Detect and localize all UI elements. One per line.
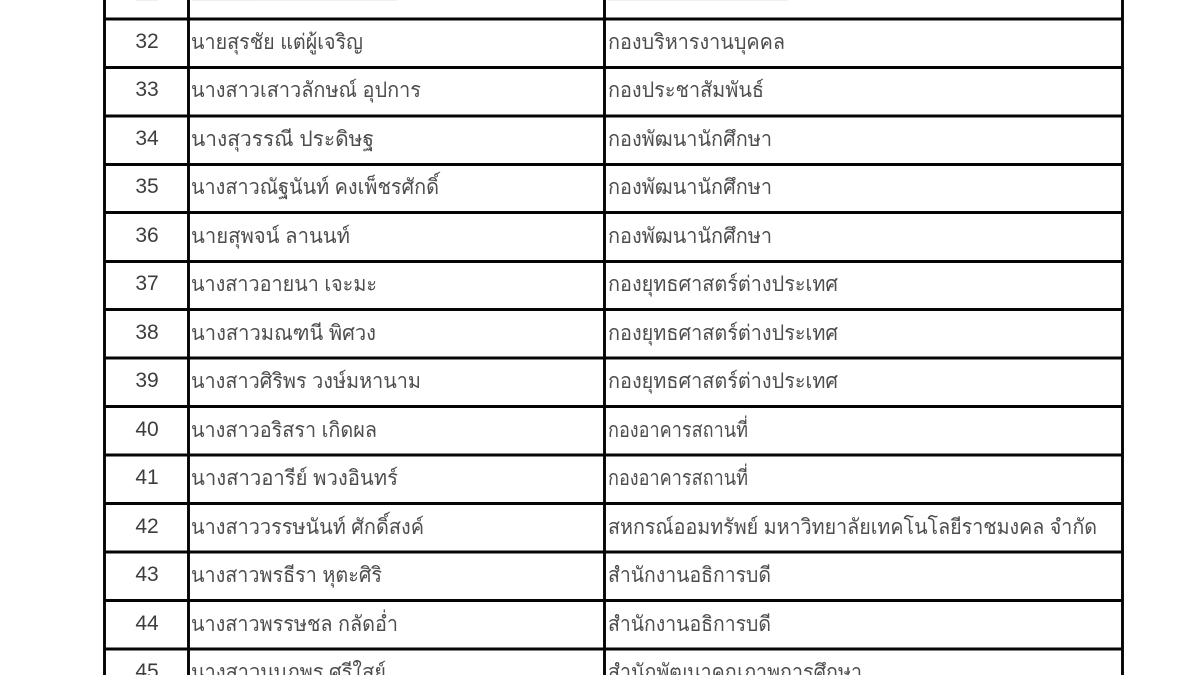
row 35 <box>135 171 772 199</box>
row 39: นางสาวศิริพร วงษ์มหานาม <box>191 369 421 393</box>
row 42: 42 <box>135 515 159 538</box>
row 37: 37 <box>135 272 159 295</box>
row 36: นายสุพจน์ ลานนท์ <box>191 224 350 249</box>
row 40: นางสาวอริสรา เกิดผล <box>191 419 377 442</box>
row 41: 41 <box>135 466 159 489</box>
row 34: 34 <box>135 127 159 150</box>
row 38: 38 <box>135 321 159 344</box>
row 35: นางสาวณัฐนันท์ คงเพ็ชรศักดิ์ <box>191 171 441 199</box>
row 34 <box>135 127 772 152</box>
row 41: กองอาคารสถานที่ <box>608 463 748 490</box>
row 39: 39 <box>135 369 159 392</box>
row 32: 32 <box>135 30 159 53</box>
row 38 <box>135 321 839 346</box>
row 35: กองพัฒนานักศึกษา <box>608 176 772 199</box>
row 33: นางสาวเสาวลักษณ์ อุปการ <box>191 78 421 103</box>
row 38: นางสาวมณฑนี พิศวง <box>191 322 376 345</box>
row 43: สำนักงานอธิการบดี <box>608 564 771 587</box>
row 33 <box>135 78 764 103</box>
row 42: นางสาววรรษนันท์ ศักดิ์สงค์ <box>191 511 424 539</box>
row 39: กองยุทธศาสตร์ต่างประเทศ <box>608 369 839 394</box>
row 36: กองพัฒนานักศึกษา <box>608 225 772 248</box>
row 43 <box>135 563 771 588</box>
row 40: 40 <box>135 418 159 441</box>
row 36: 36 <box>135 224 159 247</box>
row 42 <box>135 511 1097 539</box>
row 41: นางสาวอารีย์ พวงอินทร์ <box>191 466 398 490</box>
row 37: นางสาวอายนา เจะมะ <box>191 273 377 296</box>
row 42: สหกรณ์ออมทรัพย์ มหาวิทยาลัยเทคโนโลยีราชมงคล จำกัด <box>608 515 1097 539</box>
row 40 <box>135 415 748 442</box>
row 37 <box>135 272 839 297</box>
row 32: กองบริหารงานบุคคล <box>608 31 785 55</box>
row 44: สำนักงานอธิการบดี <box>608 613 771 636</box>
row 34: นางสุวรรณี ประดิษฐ <box>191 128 374 152</box>
row 45 <box>135 660 862 675</box>
row 36 <box>135 224 772 249</box>
row 35: 35 <box>135 175 159 198</box>
row 33: กองประชาสัมพันธ์ <box>608 78 764 102</box>
row 38: กองยุทธศาสตร์ต่างประเทศ <box>608 321 839 346</box>
row 43: 43 <box>135 563 159 586</box>
row 39 <box>135 369 839 394</box>
row 33: 33 <box>135 78 159 101</box>
row 40: กองอาคารสถานที่ <box>608 415 748 442</box>
row 32 <box>135 30 785 55</box>
row 41 <box>135 463 748 490</box>
row 32: นายสุรชัย แต่ผู้เจริญ <box>191 31 363 55</box>
row 44: นางสาวพรรษชล กลัดอ่ำ <box>191 609 398 636</box>
row 34: กองพัฒนานักศึกษา <box>608 128 772 151</box>
row 31 clipped remnant <box>136 0 788 1</box>
row 44: 44 <box>135 612 159 635</box>
row 43: นางสาวพรธีรา หุตะศิริ <box>191 564 382 588</box>
row 37: กองยุทธศาสตร์ต่างประเทศ <box>608 272 839 297</box>
row 44 <box>135 609 771 636</box>
